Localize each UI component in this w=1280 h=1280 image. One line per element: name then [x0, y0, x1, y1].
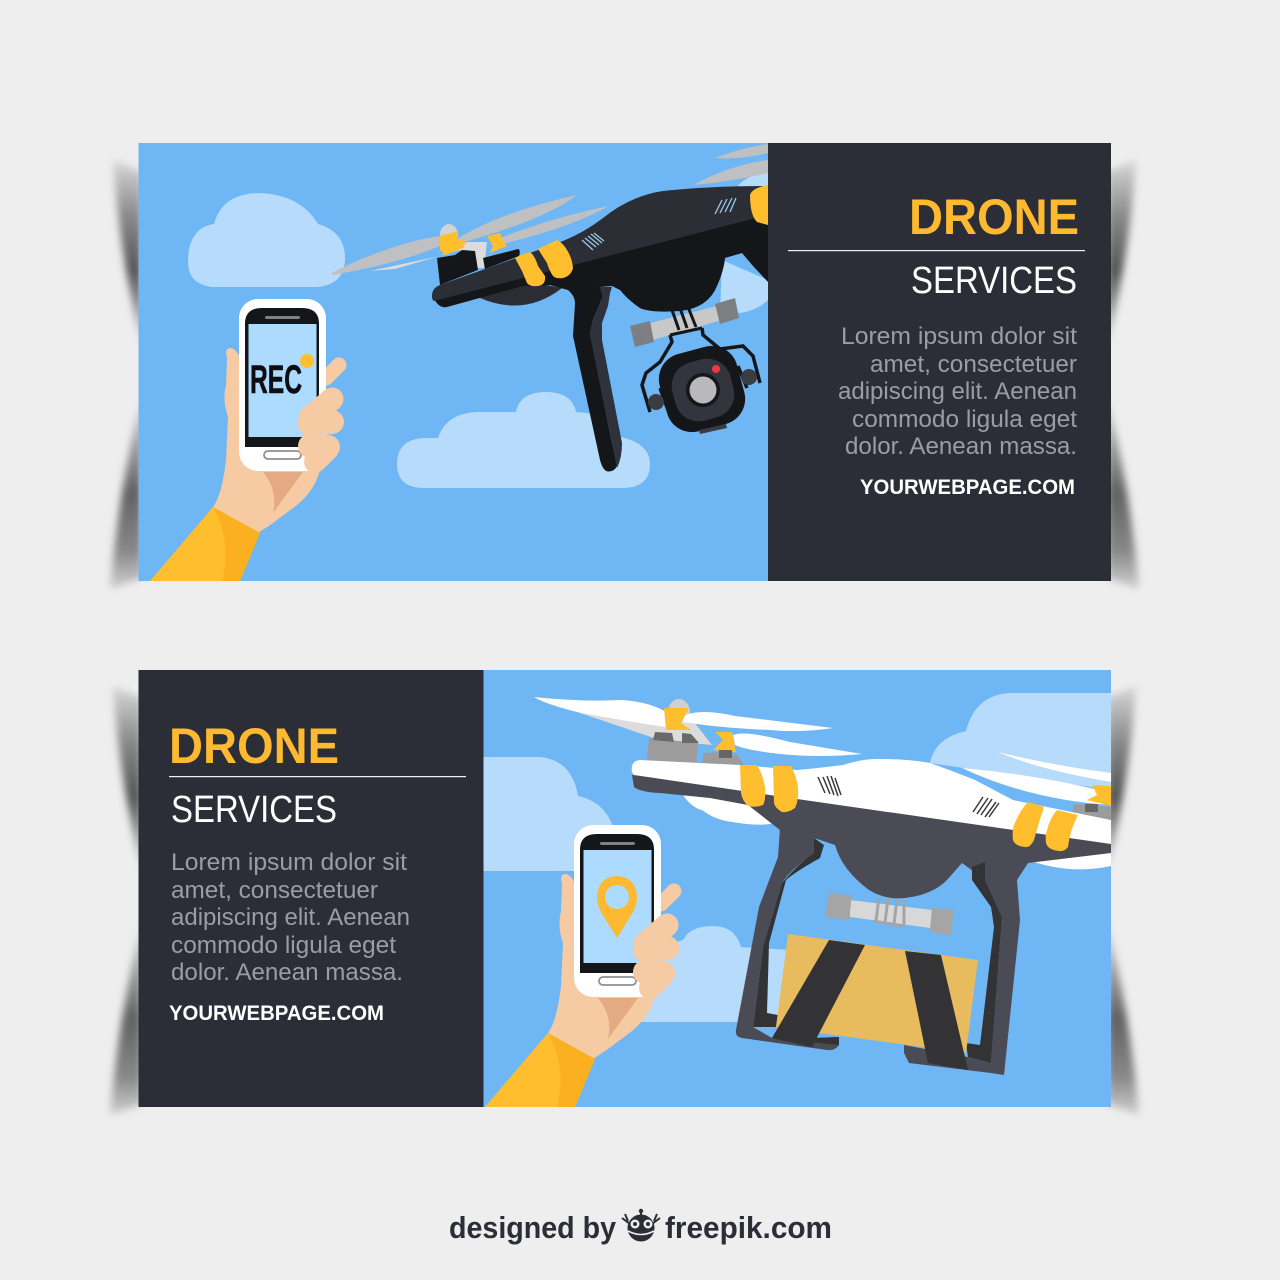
banner 2 — [138, 670, 1111, 1107]
palm — [548, 874, 655, 1059]
motors — [647, 738, 698, 763]
palm — [213, 348, 320, 533]
clouds — [483, 693, 1111, 1022]
body text — [838, 323, 1077, 460]
right leg shade — [966, 862, 1002, 1063]
body text: commodo ligula eget — [852, 406, 1077, 433]
leg shade — [590, 287, 622, 468]
gimbal — [630, 298, 760, 412]
camera — [648, 340, 757, 438]
record dot — [300, 354, 314, 368]
frame body — [632, 775, 1111, 898]
yellow bands — [740, 765, 765, 807]
body text — [171, 849, 410, 986]
icon: freepik robot — [622, 1209, 660, 1242]
body text: amet, consectetuer — [171, 877, 378, 904]
freepik.com: freepik.com — [665, 1210, 832, 1245]
prop disc — [480, 285, 562, 306]
vents — [582, 198, 736, 250]
propellers — [534, 697, 1111, 806]
sleeve — [150, 507, 260, 581]
phone — [574, 825, 661, 997]
location pin — [597, 876, 637, 938]
body text: Lorem ipsum dolor sit — [171, 849, 407, 876]
heading: DRONE — [909, 189, 1079, 245]
left leg shade — [753, 838, 839, 1045]
upper body — [432, 186, 768, 301]
vents — [818, 776, 999, 817]
underside — [433, 210, 768, 312]
body text: Lorem ipsum dolor sit — [841, 323, 1077, 350]
info panel — [768, 143, 1111, 581]
sky panel — [483, 670, 1111, 1107]
leg — [562, 287, 617, 472]
phone — [239, 299, 326, 471]
designed by: designed by — [449, 1210, 617, 1245]
hand with phone — [150, 299, 339, 581]
body text: adipiscing elit. Aenean — [838, 378, 1077, 405]
body text: adipiscing elit. Aenean — [171, 904, 410, 931]
propellers — [332, 144, 768, 275]
REC label: REC — [250, 358, 302, 402]
prop discs — [683, 795, 780, 825]
fingers — [310, 399, 332, 462]
body text: dolor. Aenean massa. — [171, 959, 403, 986]
motors — [437, 250, 478, 285]
url: YOURWEBPAGE.COM — [860, 476, 1075, 499]
far finger — [661, 891, 674, 904]
drone: white with parcel — [534, 697, 1111, 1075]
gimbal — [825, 893, 954, 935]
white top shell — [632, 759, 1111, 844]
subheading: SERVICES — [171, 789, 337, 831]
sky panel — [138, 143, 768, 581]
url: YOURWEBPAGE.COM — [169, 1002, 384, 1025]
hand with phone — [485, 825, 674, 1107]
body text: amet, consectetuer — [870, 351, 1077, 378]
banner shadows — [110, 160, 1139, 1115]
yellow bands — [515, 252, 545, 286]
left leg — [736, 828, 839, 1050]
subheading: SERVICES — [911, 260, 1077, 302]
parcel — [772, 934, 978, 1070]
info panel — [138, 670, 484, 1107]
banner 1 — [138, 143, 1111, 581]
right leg — [904, 863, 1028, 1075]
body text: commodo ligula eget — [171, 932, 396, 959]
far finger — [326, 365, 339, 378]
clouds — [188, 172, 768, 488]
heading: DRONE — [169, 718, 339, 774]
body text: dolor. Aenean massa. — [845, 433, 1077, 460]
footer credit — [449, 1209, 832, 1245]
sleeve — [485, 1033, 595, 1107]
fingers — [645, 925, 667, 988]
drone: black with camera — [332, 144, 768, 472]
